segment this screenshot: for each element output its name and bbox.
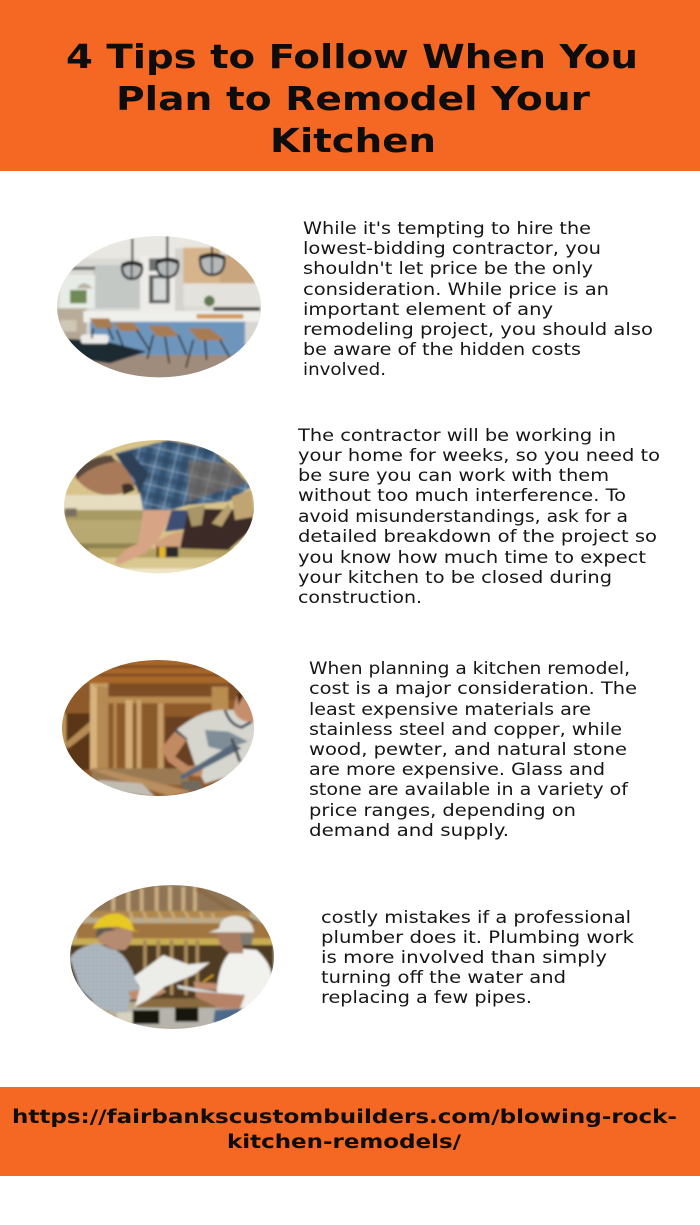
text block: tip 4: turning off the water and (321, 968, 566, 987)
title (66, 37, 638, 160)
text block: tip 2: your home for weeks, so you need to (298, 446, 660, 465)
text block: tip 4: replacing a few pipes. (321, 988, 532, 1007)
text block: tip 3: wood, pewter, and natural stone (309, 740, 627, 759)
text block: tip 4: is more involved than simply (321, 948, 607, 967)
text block: tip 3: are more expensive. Glass and (309, 760, 605, 779)
text block: tip 3: stainless steel and copper, while (309, 720, 622, 739)
text block: tip 3: When planning a kitchen remodel, (309, 659, 630, 678)
title: Kitchen (270, 121, 436, 160)
footer link text: https://fairbankscustombuilders.com/blowing-rock- (12, 1107, 677, 1128)
text block: tip 2: detailed breakdown of the project so (298, 527, 657, 546)
photo: carpenter in plaid shirt (64, 440, 254, 574)
text block: tip 1: be aware of the hidden costs (303, 340, 581, 359)
text block: tip 1: consideration. While price is an (303, 280, 609, 299)
text block: tip 4: costly mistakes if a professional (321, 908, 631, 927)
text block: tip 1: important element of any (303, 300, 553, 319)
text block: tip 3 (309, 659, 637, 840)
text block: tip 2: you know how much time to expect (298, 548, 647, 567)
text block: tip 3: price ranges, depending on (309, 801, 576, 820)
text block: tip 1: lowest-bidding contractor, you (303, 239, 601, 258)
text block: tip 3: cost is a major consideration. The (309, 679, 637, 698)
text block: tip 1: remodeling project, you should also (303, 320, 653, 339)
text block: tip 2: avoid misunderstandings, ask for a (298, 507, 628, 526)
title: 4 Tips to Follow When You (66, 37, 638, 76)
footer banner (0, 1087, 700, 1176)
text block: tip 2 (297, 426, 660, 607)
text block: tip 4 (321, 908, 635, 1007)
text block: tip 3: least expensive materials are (309, 700, 591, 719)
title: Plan to Remodel Your (116, 79, 591, 118)
text block: tip 2: without too much interference. To (298, 486, 626, 505)
header banner (0, 0, 700, 171)
text block: tip 1 (303, 219, 653, 379)
text block: tip 4: plumber does it. Plumbing work (321, 928, 635, 947)
photo: two builders reviewing plans (70, 885, 274, 1029)
photo: kitchen interior (57, 236, 261, 378)
text block: tip 2: be sure you can work with them (298, 466, 609, 485)
text block: tip 3: stone are available in a variety of (309, 780, 629, 799)
text block: tip 1: shouldn't let price be the only (303, 259, 593, 278)
text block: tip 2: construction. (298, 588, 422, 607)
footer link text (12, 1107, 677, 1153)
text block: tip 2: your kitchen to be closed during (298, 568, 612, 587)
text block: tip 3: demand and supply. (309, 821, 509, 840)
text block: tip 1: While it's tempting to hire the (303, 219, 591, 238)
photo: worker with hammer in timber frame (62, 660, 254, 796)
text block: tip 2: The contractor will be working in (297, 426, 616, 445)
text block: tip 1: involved. (303, 360, 386, 379)
footer link text: kitchen-remodels/ (227, 1132, 461, 1153)
